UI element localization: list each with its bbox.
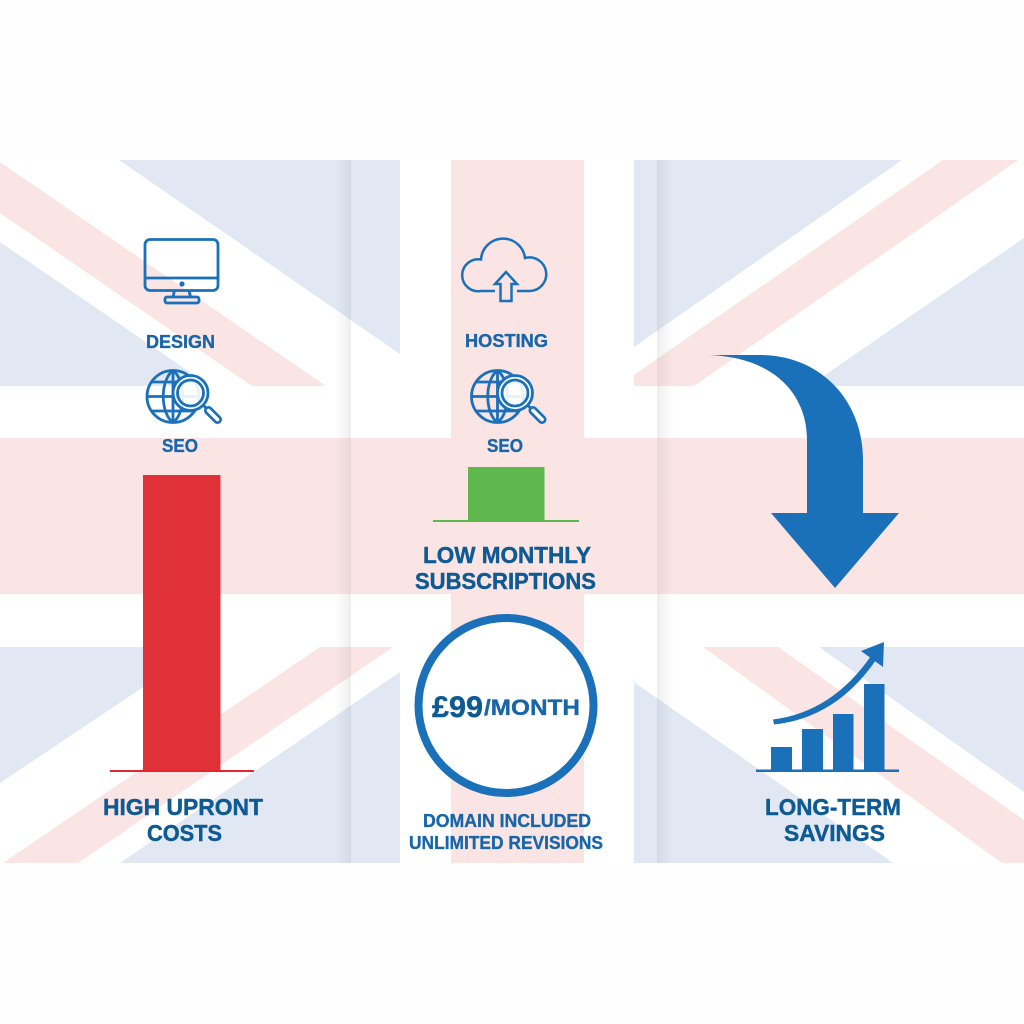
heading: low monthly subscriptions: LOW MONTHLY bbox=[423, 542, 591, 568]
panel: long-term savings bbox=[708, 355, 901, 846]
panel: high upfront costs bbox=[103, 240, 264, 846]
label: seo: SEO bbox=[162, 436, 198, 456]
panel: low monthly subscriptions bbox=[409, 239, 603, 853]
icon: cloud upload bbox=[462, 239, 546, 301]
heading: low monthly subscriptions: SUBSCRIPTIONS bbox=[415, 568, 596, 594]
heading: high upfront costs bbox=[103, 794, 264, 846]
price badge bbox=[418, 618, 594, 793]
heading: long-term savings: SAVINGS bbox=[784, 820, 885, 846]
heading: low monthly subscriptions bbox=[415, 542, 596, 594]
heading: high upfront costs: COSTS bbox=[147, 820, 222, 846]
background: Union Jack flag bbox=[0, 160, 1024, 863]
heading: long-term savings bbox=[765, 794, 901, 846]
chart: rising bars with arrow bbox=[756, 642, 899, 772]
features list bbox=[409, 811, 603, 853]
arrow: curved down bbox=[708, 355, 899, 588]
bar: low cost bbox=[433, 467, 579, 522]
label: seo: SEO bbox=[487, 436, 523, 456]
features list: DOMAIN INCLUDED bbox=[423, 811, 591, 831]
icon: globe with magnifier bbox=[147, 370, 218, 422]
heading: long-term savings: LONG-TERM bbox=[765, 794, 901, 820]
icon: desktop monitor bbox=[145, 240, 218, 303]
price badge: £99 bbox=[432, 691, 483, 724]
price badge: /MONTH bbox=[484, 695, 580, 720]
icon: globe with magnifier bbox=[472, 370, 542, 422]
bar: high cost bbox=[110, 475, 254, 772]
features list: UNLIMITED REVISIONS bbox=[409, 833, 603, 853]
heading: high upfront costs: HIGH UPRONT bbox=[103, 794, 264, 820]
label: design: DESIGN bbox=[146, 332, 215, 352]
label: hosting: HOSTING bbox=[465, 331, 548, 351]
